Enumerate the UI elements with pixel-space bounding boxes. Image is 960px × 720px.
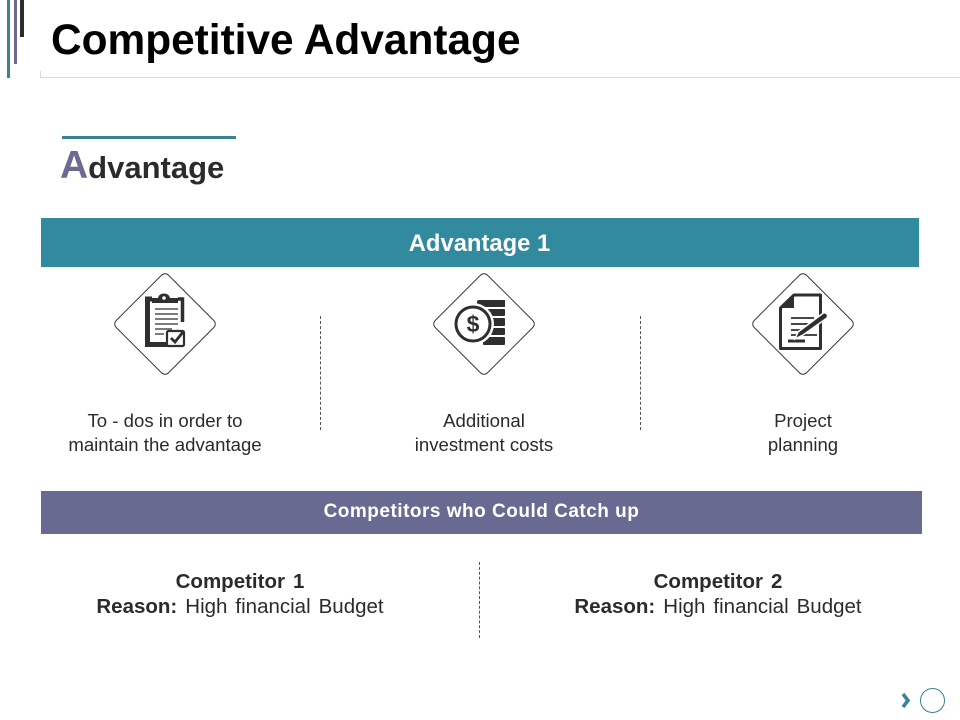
decorative corner bars <box>7 0 41 78</box>
section heading: Advantage <box>60 144 224 187</box>
text: project planning <box>768 410 838 455</box>
text: investment costs: Additional <box>443 410 525 431</box>
icon: document with pen <box>752 273 854 375</box>
text: competitor 1: Competitor 1 <box>176 570 304 593</box>
banner: competitors <box>41 491 922 534</box>
text: competitor 1: Reason: High financial Budget <box>96 595 384 618</box>
icon: clipboard with checkmark <box>114 273 216 375</box>
text: competitor 1 <box>96 570 384 618</box>
banner: competitors: Competitors who Could Catch up <box>324 501 639 522</box>
text: project planning: planning <box>768 434 838 455</box>
title underline <box>40 77 960 78</box>
text: project planning: Project <box>774 410 832 431</box>
banner: Advantage 1: Advantage 1 <box>409 230 550 257</box>
divider 1 <box>320 316 321 430</box>
icon: dollar coin with stack: $ <box>467 311 480 337</box>
divider 2 <box>640 316 641 430</box>
text: to-dos: maintain the advantage <box>68 434 262 455</box>
text: to-dos: To - dos in order to <box>87 410 243 431</box>
section heading accent line <box>62 136 236 139</box>
icon: next chevron and circle <box>902 688 945 713</box>
text: to-dos <box>68 410 262 455</box>
text: competitor 2 <box>574 570 862 618</box>
text: investment costs <box>415 410 553 455</box>
text: competitor 2: Competitor 2 <box>654 570 782 593</box>
banner: Advantage 1 <box>41 218 919 267</box>
text: competitor 2: Reason: High financial Budget <box>574 595 862 618</box>
icon: dollar coin with stack <box>433 273 535 375</box>
text: investment costs: investment costs <box>415 434 553 455</box>
center divider <box>479 562 480 638</box>
title: Competitive Advantage <box>51 16 521 63</box>
